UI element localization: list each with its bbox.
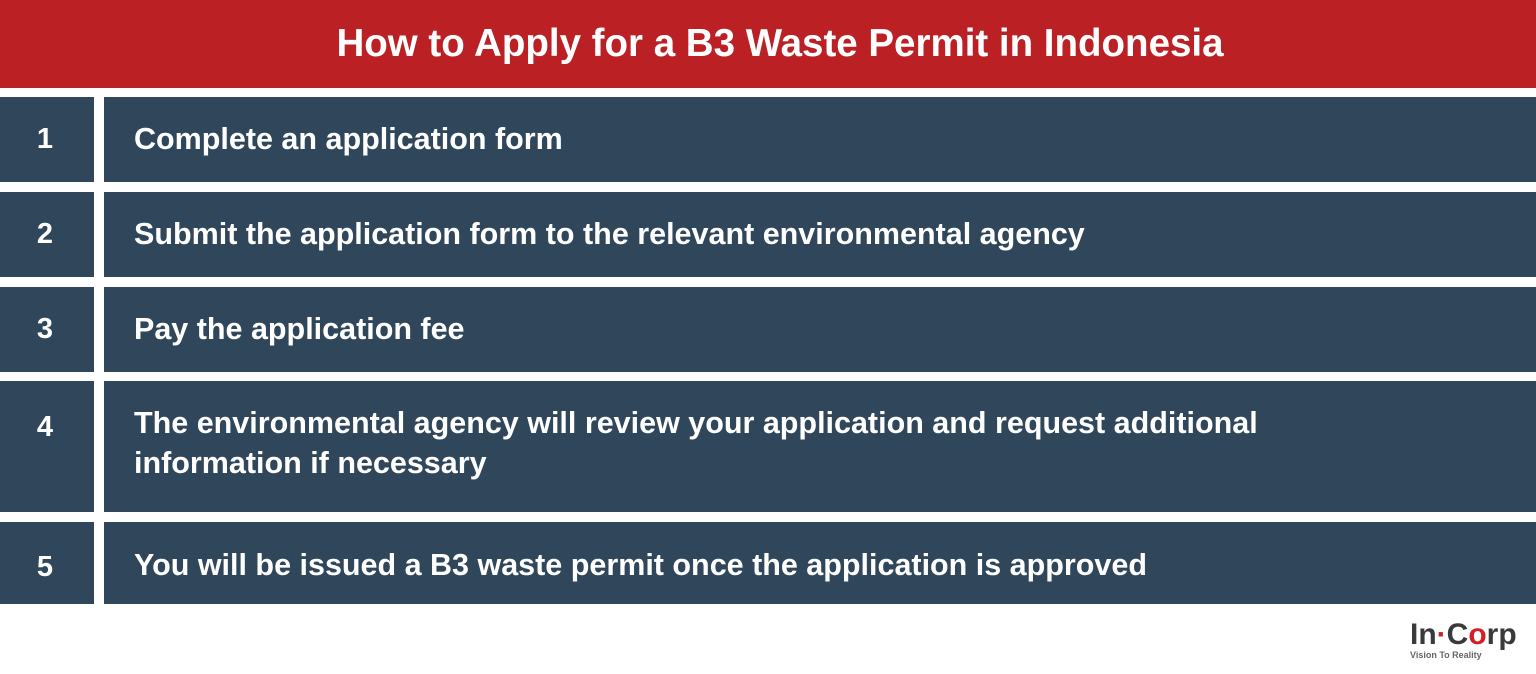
step 5 text: You will be issued a B3 waste permit once the application is approved xyxy=(134,548,1147,582)
step 4 number: 4 xyxy=(37,411,53,443)
step 3 text xyxy=(104,287,1536,372)
step 2 number: 2 xyxy=(37,218,53,250)
title: How to Apply for a B3 Waste Permit in Indonesia xyxy=(336,22,1224,65)
step 5 number: 5 xyxy=(37,551,53,583)
step 1 number xyxy=(0,97,94,182)
step 5 number xyxy=(0,522,94,604)
step 2 number xyxy=(0,192,94,277)
step 4 text: The environmental agency will review your application and request additional xyxy=(134,406,1258,440)
step 2 text xyxy=(104,192,1536,277)
step 3 text: Pay the application fee xyxy=(134,312,465,346)
step 2 text: Submit the application form to the relevant environmental agency xyxy=(134,217,1085,251)
step 3 number xyxy=(0,287,94,372)
step 1 text xyxy=(104,97,1536,182)
logo: Vision To Reality xyxy=(1410,650,1482,660)
logo: In·Corp xyxy=(1410,618,1517,651)
step 1 number: 1 xyxy=(37,123,53,155)
step 4 number xyxy=(0,381,94,512)
step 3 number: 3 xyxy=(37,313,53,345)
step 4 text xyxy=(104,381,1536,512)
step 4 text: information if necessary xyxy=(134,446,487,480)
step 1 text: Complete an application form xyxy=(134,122,563,156)
title xyxy=(0,0,1536,88)
step 5 text xyxy=(104,522,1536,604)
